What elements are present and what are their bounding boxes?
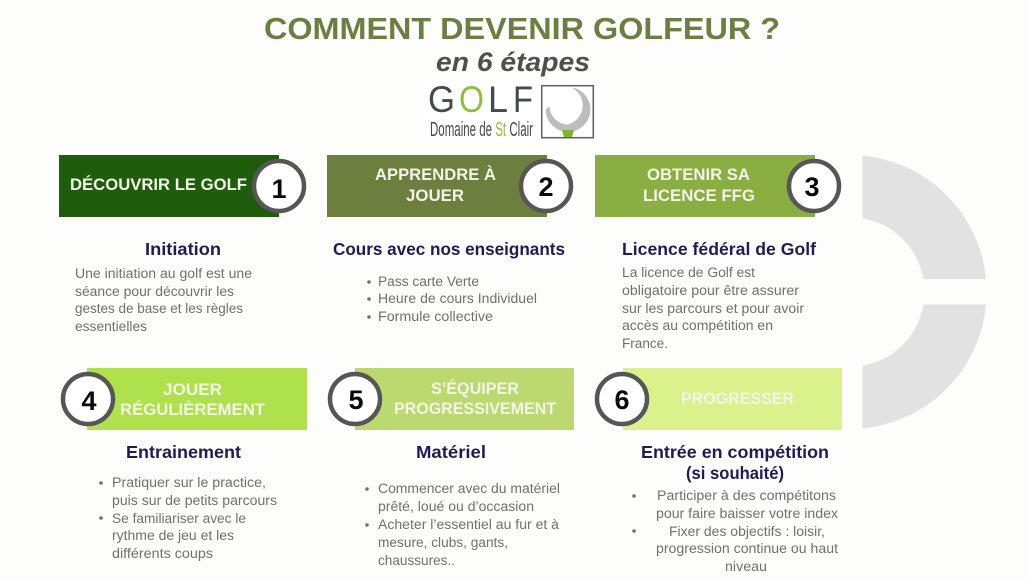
list 2: Heure de cours Individuel bbox=[378, 291, 537, 306]
banner 5 label bbox=[394, 379, 557, 418]
list 5 bbox=[365, 481, 560, 568]
logo: Golf Domaine de St Clair: Domaine de St Clair bbox=[430, 119, 533, 141]
banner 6 label: PROGRESSER bbox=[681, 389, 794, 408]
heading 2: Cours avec nos enseignants bbox=[333, 239, 565, 259]
banner 5 label: PROGRESSIVEMENT bbox=[394, 399, 557, 418]
list 4: Se familiariser avec le bbox=[112, 511, 246, 526]
heading 5: Matériel bbox=[416, 442, 486, 462]
list 6 bbox=[632, 488, 838, 574]
badge 4: 4 bbox=[81, 386, 97, 416]
list 5: Commencer avec du matériel bbox=[378, 481, 560, 496]
decorative ring: grey half circle bbox=[862, 156, 986, 428]
heading 3: Licence fédéral de Golf bbox=[622, 239, 816, 259]
heading 6: Entrée en compétition bbox=[641, 442, 829, 462]
list 4 bbox=[99, 475, 277, 561]
text 3: La licence de Golf est bbox=[622, 265, 755, 280]
badge 4 bbox=[63, 374, 113, 424]
text 3: France. bbox=[622, 336, 668, 351]
banner 3 label: LICENCE FFG bbox=[643, 186, 755, 205]
badge 2: 2 bbox=[538, 172, 554, 202]
badge 1 bbox=[254, 161, 304, 211]
step 2 bbox=[327, 155, 571, 324]
logo: Golf Domaine de St Clair: L bbox=[488, 79, 508, 120]
banner 3 bbox=[595, 155, 815, 217]
list 6: niveau bbox=[725, 559, 767, 574]
badge 3: 3 bbox=[804, 172, 820, 202]
text 3: sur les parcours et pour avoir bbox=[622, 301, 805, 316]
banner 2 bbox=[327, 155, 547, 217]
step 6 bbox=[597, 368, 842, 574]
banner 4 label: RÉGULIÈREMENT bbox=[120, 400, 266, 419]
logo: Golf Domaine de St Clair bbox=[423, 79, 600, 142]
banner 1 bbox=[59, 155, 279, 217]
list 6: pour faire baisser votre index bbox=[656, 506, 838, 521]
list 4: Pratiquer sur le practice, bbox=[112, 475, 266, 490]
step 3 bbox=[595, 155, 839, 351]
heading 4: Entrainement bbox=[126, 442, 241, 462]
title: COMMENT DEVENIR GOLFEUR ? bbox=[264, 11, 780, 46]
logo: Golf Domaine de St Clair: G bbox=[428, 79, 455, 120]
list 6: Fixer des objectifs : loisir, bbox=[669, 524, 825, 539]
banner 1 label: DÉCOUVRIR LE GOLF bbox=[70, 175, 247, 194]
step 4 bbox=[63, 368, 307, 561]
logo: Golf Domaine de St Clair: O bbox=[459, 79, 484, 120]
banner 5 label: S’ÉQUIPER bbox=[431, 379, 519, 398]
badge 5 bbox=[330, 374, 380, 424]
text 1: séance pour découvrir les bbox=[75, 284, 234, 299]
list 5: mesure, clubs, gants, bbox=[378, 535, 508, 550]
heading 1: Initiation bbox=[145, 239, 221, 259]
banner 4 bbox=[87, 368, 307, 430]
step 1 bbox=[59, 155, 304, 334]
text 1 bbox=[75, 266, 252, 334]
list 4: différents coups bbox=[112, 546, 213, 561]
badge 6 bbox=[597, 374, 647, 424]
list 4: puis sur de petits parcours bbox=[112, 493, 277, 508]
text 1: essentielles bbox=[75, 319, 147, 334]
list 2: Pass carte Verte bbox=[378, 274, 479, 289]
badge 5: 5 bbox=[348, 385, 364, 415]
list 2: Formule collective bbox=[378, 309, 493, 324]
banner 2 label: APPRENDRE À bbox=[375, 165, 496, 184]
list 5: prêté, loué ou d’occasion bbox=[378, 499, 534, 514]
banner 3 label: OBTENIR SA bbox=[647, 165, 750, 184]
list 5: chaussures.. bbox=[378, 553, 455, 568]
banner 5 bbox=[355, 368, 574, 430]
heading 6 bbox=[641, 442, 829, 483]
list 5: Acheter l’essentiel au fur et à bbox=[378, 517, 559, 532]
banner 6 bbox=[623, 368, 842, 430]
heading 6: (si souhaité) bbox=[686, 463, 784, 483]
badge 2 bbox=[521, 161, 571, 211]
badge 1: 1 bbox=[271, 174, 287, 204]
list 2 bbox=[367, 274, 537, 324]
text 3: accès au compétition en bbox=[622, 318, 773, 333]
logo: Golf Domaine de St Clair: F bbox=[513, 79, 533, 120]
badge 3 bbox=[789, 161, 839, 211]
text 1: gestes de base et les règles bbox=[75, 301, 243, 316]
list 6: Participer à des compétitons bbox=[657, 488, 836, 503]
banner 4 label: JOUER bbox=[163, 380, 222, 399]
list 4: rythme de jeu et les bbox=[112, 528, 234, 543]
text 3 bbox=[622, 265, 805, 351]
banner 3 label bbox=[643, 165, 755, 205]
banner 2 label bbox=[375, 165, 496, 205]
step 5 bbox=[330, 368, 574, 568]
banner 2 label: JOUER bbox=[406, 186, 464, 205]
text 1: Une initiation au golf est une bbox=[75, 266, 252, 281]
subtitle: en 6 étapes bbox=[436, 47, 590, 77]
list 6: progression continue ou haut bbox=[656, 541, 838, 556]
banner 4 label bbox=[120, 380, 266, 419]
badge 6: 6 bbox=[614, 385, 630, 415]
text 3: obligatoire pour être assurer bbox=[622, 283, 800, 298]
